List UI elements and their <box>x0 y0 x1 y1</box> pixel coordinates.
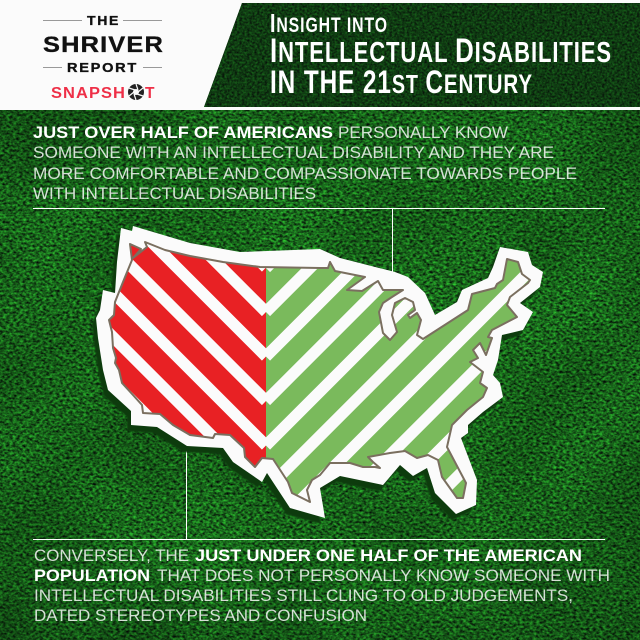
logo: The Shriver Report: THE <box>87 13 120 28</box>
top connector line <box>33 208 605 274</box>
bottom text block: CONVERSELY, THE <box>34 546 189 565</box>
logo: The Shriver Report: REPORT <box>67 61 138 75</box>
map outline <box>109 242 530 502</box>
green half stripes <box>266 268 528 500</box>
bottom text block: POPULATION <box>34 566 150 585</box>
top text block: WITH INTELLECTUAL DISABILITIES <box>33 184 316 203</box>
top text block: MORE COMFORTABLE AND COMPASSIONATE TOWARDS PEOPLE <box>33 164 577 183</box>
top text block: JUST OVER HALF OF AMERICANS <box>33 123 333 142</box>
logo: The Shriver Report <box>43 13 164 75</box>
bottom text block: THAT DOES NOT PERSONALLY KNOW SOMEONE WITH <box>157 566 610 585</box>
bottom text block: DATED STEREOTYPES AND CONFUSION <box>34 606 367 625</box>
top text block <box>33 123 577 203</box>
top text block: SOMEONE WITH AN INTELLECTUAL DISABILITY AND THEY ARE <box>33 143 554 162</box>
red half stripes <box>112 244 266 450</box>
map of the United States <box>90 220 556 530</box>
top text block: PERSONALLY KNOW <box>338 123 508 142</box>
bottom text block: INTELLECTUAL DISABILITIES STILL CLING TO OLD JUDGEMENTS, <box>34 586 573 605</box>
map white sticker border <box>96 226 543 518</box>
bottom text block <box>34 546 610 625</box>
logo: Snapshot: T <box>145 85 155 102</box>
title text: IN THE 21ST CENTURY <box>270 64 533 100</box>
header: logo panel <box>0 0 640 110</box>
logo: Snapshot <box>51 84 155 102</box>
logo: The Shriver Report: SHRIVER <box>43 32 164 57</box>
title text <box>270 8 612 100</box>
bottom connector line <box>33 445 605 540</box>
icon: camera aperture <box>128 84 144 100</box>
bottom text block: JUST UNDER ONE HALF OF THE AMERICAN <box>195 546 582 565</box>
map striped fill <box>110 246 529 497</box>
logo: Snapshot: SNAPSH <box>51 85 126 102</box>
map shadow <box>92 232 539 524</box>
title text: INSIGHT INTO <box>270 8 388 38</box>
header: title panel <box>200 3 640 107</box>
